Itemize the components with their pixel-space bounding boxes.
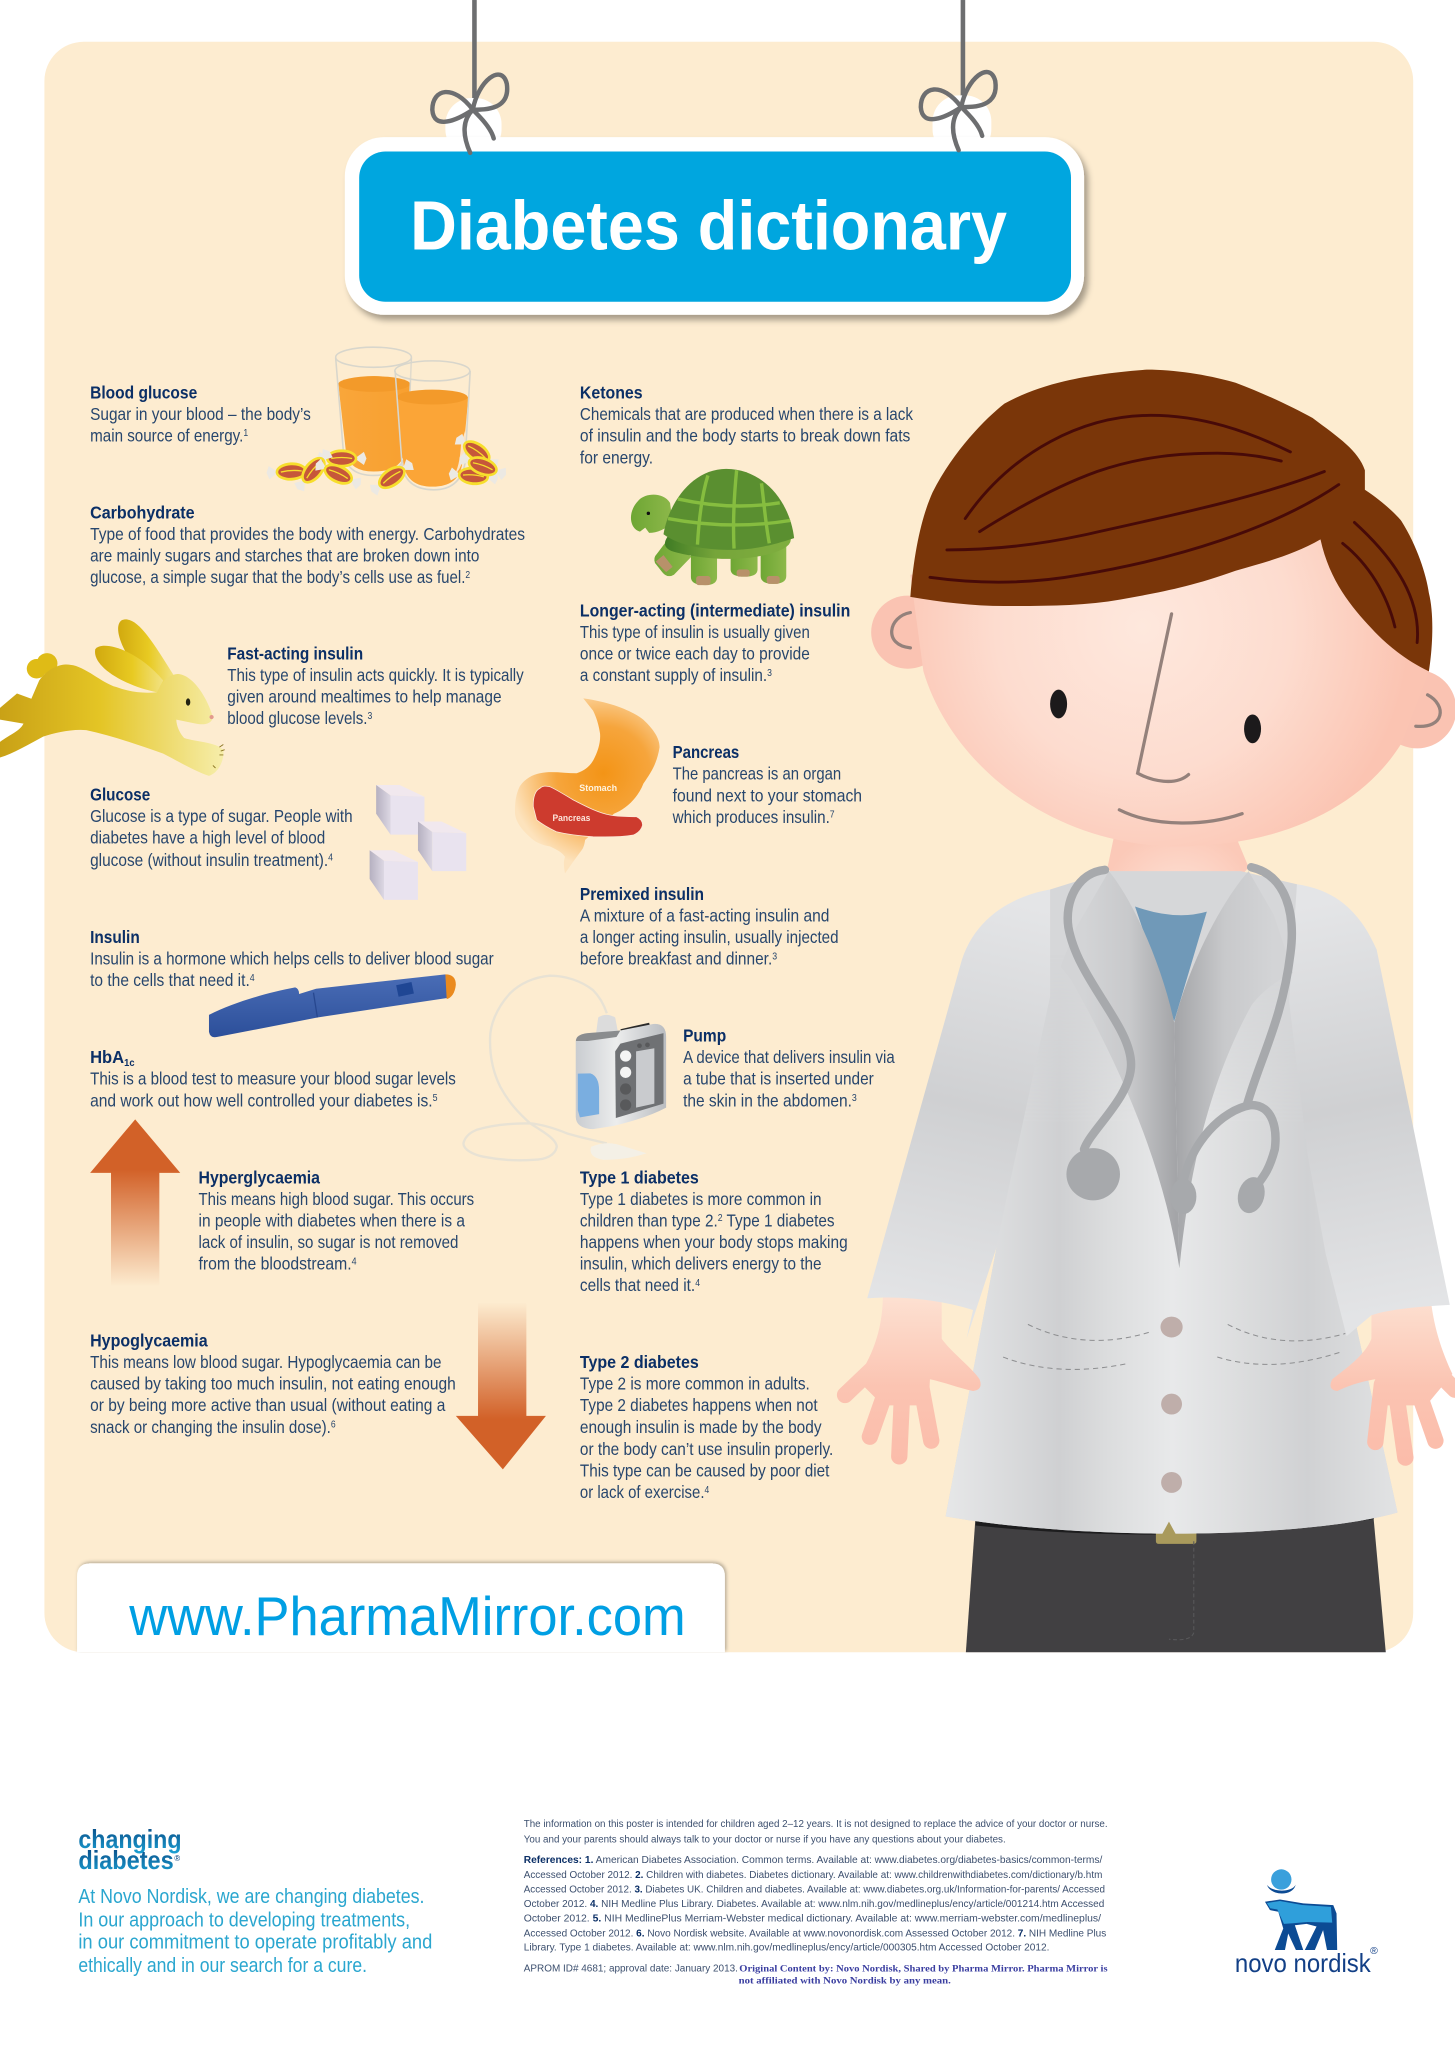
logo: changing diabetes: ®: [174, 1854, 180, 1863]
heading: Pump: [683, 1026, 726, 1046]
text: Novo Nordisk statement: [78, 1886, 432, 1977]
entry: Ketones: for energy.: [580, 448, 653, 468]
entry: Hyperglycaemia: [199, 1167, 474, 1274]
icon: stomach and pancreas: Pancreas: [552, 813, 590, 823]
entry: Glucose: glucose (without insulin treatment).: [90, 850, 356, 870]
sign: title board: [345, 137, 1084, 315]
icon: turtle: [631, 469, 794, 585]
heading: Blood glucose: [90, 382, 198, 402]
text: disclaimer and references: not affiliated with Novo Nordisk by any mean.: [739, 1975, 951, 1986]
lapels: [1061, 871, 1293, 1268]
face: [910, 522, 1429, 846]
entry: Type 1 diabetes: Type 1 diabetes: [723, 1210, 835, 1230]
entry: Longer-acting insulin: once or twice each day to provide: [580, 644, 810, 664]
entry: Insulin: 4: [250, 973, 255, 984]
entry: Type 2 diabetes: or lack of exercise.: [580, 1482, 724, 1502]
pocket stitching: [1003, 1324, 1345, 1369]
entry: Pump: A device that delivers insulin via: [683, 1047, 895, 1067]
entry: Type 2 diabetes: Type 2 is more common in adults.: [580, 1374, 810, 1394]
entry: Longer-acting insulin: a constant supply of insulin.: [580, 665, 792, 685]
icon: insulin pen: [209, 974, 456, 1037]
logo: changing diabetes: changing: [78, 1824, 182, 1854]
text: disclaimer and references: The information on this poster is intended for children aged 2–12 years. It is not designed to replace the advice of your doctor or nurse.: [524, 1819, 1108, 1830]
icon: two glasses of juice with sweets: [266, 347, 509, 499]
entry: Fast-acting insulin: blood glucose levels.: [227, 708, 387, 728]
entry: Blood glucose: 1: [243, 428, 248, 439]
entry: Carbohydrate: are mainly sugars and starches that are broken down into: [90, 546, 479, 566]
heading: Type 2 diabetes: [580, 1352, 699, 1372]
arrow: down (hypoglycaemia): [456, 1302, 546, 1469]
entry: Hyperglycaemia: 4: [352, 1256, 357, 1267]
entry: Type 1 diabetes: 2: [718, 1213, 723, 1224]
entry: Carbohydrate: Type of food that provides the body with energy. Carbohydrates: [90, 524, 525, 544]
logo: changing diabetes: diabetes: [78, 1845, 174, 1875]
entry: Pancreas: 7: [830, 810, 835, 821]
entry: Pancreas: [672, 742, 862, 827]
heading: Longer-acting (intermediate) insulin: [580, 600, 850, 620]
entry: Longer-acting insulin: 3: [767, 668, 772, 679]
entry: Pump: the skin in the abdomen.: [683, 1090, 871, 1110]
entry: Blood glucose: Sugar in your blood – the body’s: [90, 404, 311, 424]
entry: Hypoglycaemia: This means low blood sugar. Hypoglycaemia can be: [90, 1352, 441, 1372]
logo: Novo Nordisk: ®: [1370, 1946, 1378, 1957]
entry: Type 2 diabetes: or the body can’t use insulin properly.: [580, 1439, 833, 1459]
heading: Fast-acting insulin: [227, 644, 363, 664]
entry: Fast-acting insulin: given around mealtimes to help manage: [227, 687, 502, 707]
entry: Insulin: [90, 927, 494, 990]
text: disclaimer and references: October 2012. 4. NIH Medline Plus Library. Diabetes. Available at: www.nlm.nih.gov/medlineplus/ency/article/001214.htm Accessed: [524, 1899, 1104, 1910]
entry: Type 1 diabetes: 4: [695, 1278, 701, 1289]
title: Diabetes dictionary: [410, 186, 1007, 264]
text: disclaimer and references: [524, 1819, 1108, 1986]
heading: Hypoglycaemia: [90, 1331, 208, 1351]
icon: rabbit: [0, 619, 225, 776]
entry: Ketones: of insulin and the body starts to break down fats: [580, 425, 910, 445]
entry: Ketones: [580, 382, 913, 468]
text: disclaimer and references: Library. Type 1 diabetes. Available at: www.nlm.nih.gov/medlineplus/ency/article/000305.htm Accessed October 2012.: [524, 1943, 1049, 1954]
text: Novo Nordisk statement: in our commitment to operate profitably and: [78, 1932, 432, 1954]
entry: Glucose: 4: [328, 853, 334, 864]
heading: Glucose: [90, 785, 151, 805]
heading: Type 1 diabetes: [580, 1167, 699, 1187]
entry: Ketones: Chemicals that are produced when there is a lack: [580, 404, 913, 424]
text: disclaimer and references: October 2012. 5. NIH MedlinePlus Merriam-Webster medical dictionary. Available at: www.merriam-webster.com/medlineplus/: [524, 1913, 1101, 1924]
logo: Novo Nordisk: [1235, 1869, 1378, 1978]
neck: [1108, 836, 1249, 914]
entry: Type 1 diabetes: [580, 1167, 848, 1295]
entry: Glucose: [90, 785, 353, 870]
entry: Type 2 diabetes: This type can be caused by poor diet: [580, 1461, 830, 1481]
entry: Pump: a tube that is inserted under: [683, 1069, 874, 1089]
trousers: [966, 1509, 1386, 1652]
entry: Hyperglycaemia: from the bloodstream.: [199, 1254, 366, 1274]
hand: right: [1330, 1293, 1455, 1458]
entry: Type 1 diabetes: children than type 2.: [580, 1210, 735, 1230]
entry: Hypoglycaemia: or by being more active than usual (without eating a: [90, 1395, 446, 1415]
knot: right bow: [921, 72, 996, 150]
panel: cream background: [44, 42, 1413, 1652]
entry: Longer-acting insulin: [580, 600, 850, 685]
icon: stomach and pancreas: [515, 698, 660, 873]
website banner: [52, 1563, 744, 1663]
hair: [910, 370, 1432, 671]
entry: Fast-acting insulin: [227, 644, 524, 728]
logo: changing diabetes: [78, 1824, 182, 1875]
entry: Type 2 diabetes: 4: [704, 1485, 710, 1496]
entry: Pancreas: The pancreas is an organ: [673, 764, 841, 784]
heading: 1c: [124, 1058, 135, 1069]
ears: [871, 596, 1455, 748]
entry: Hyperglycaemia: lack of insulin, so sugar is not removed: [199, 1232, 458, 1252]
entry: Pancreas: found next to your stomach: [673, 785, 862, 805]
entry: Type 1 diabetes: insulin, which delivers energy to the: [580, 1254, 822, 1274]
entry: Pump: [683, 1026, 895, 1110]
entry: Premixed insulin: a longer acting insulin, usually injected: [580, 927, 839, 947]
text: disclaimer and references: APROM ID# 4681; approval date: January 2013.: [524, 1964, 738, 1975]
text: disclaimer and references: Accessed October 2012. 3. Diabetes UK. Children and diabetes. Available at: www.diabetes.org.uk/Information-for-parents/ Accessed: [524, 1885, 1105, 1896]
entry: Hypoglycaemia: caused by taking too much insulin, not eating enough: [90, 1374, 456, 1394]
heading: Insulin: [90, 927, 140, 947]
entry: Hypoglycaemia: [90, 1331, 456, 1437]
heading: Premixed insulin: [580, 884, 704, 904]
entry: Hypoglycaemia: 6: [331, 1420, 336, 1431]
heading: HbA: [90, 1047, 126, 1067]
heading: Carbohydrate: [90, 503, 195, 523]
entry: HbA1c: This is a blood test to measure your blood sugar levels: [90, 1069, 456, 1089]
icon: insulin pump: [463, 976, 666, 1160]
icon: bull: [1265, 1869, 1337, 1950]
entry: Hyperglycaemia: This means high blood sugar. This occurs: [199, 1189, 474, 1209]
entry: Blood glucose: main source of energy.: [90, 425, 264, 445]
website banner: www.PharmaMirror.com: [128, 1585, 686, 1647]
arrow: up (hyperglycaemia): [90, 1119, 180, 1287]
entry: Carbohydrate: 2: [465, 570, 470, 581]
hand: left: [845, 1293, 981, 1456]
mouth: [1119, 810, 1242, 823]
entry: Fast-acting insulin: This type of insulin acts quickly. It is typically: [227, 665, 524, 685]
entry: Pancreas: which produces insulin.: [673, 807, 851, 827]
entry: HbA1c: 5: [433, 1093, 438, 1104]
entry: Insulin: to the cells that need it.: [90, 970, 267, 990]
text: disclaimer and references: You and your parents should always talk to your doctor or nurse if you have any questions about your diabetes.: [524, 1834, 1006, 1845]
entry: Glucose: diabetes have a high level of blood: [90, 828, 325, 848]
coat body: [946, 871, 1398, 1536]
entry: Type 1 diabetes: happens when your body stops making: [580, 1232, 848, 1252]
entry: Insulin: Insulin is a hormone which helps cells to deliver blood sugar: [90, 949, 494, 969]
text: disclaimer and references: Accessed October 2012. 2. Children with diabetes. Diabetes dictionary. Available at: www.childrenwithdiabetes.com/dictionary/b.htm: [524, 1870, 1102, 1881]
hanging strings and knots: [445, 0, 991, 155]
eyes: [1050, 690, 1261, 743]
entry: Hyperglycaemia: in people with diabetes when there is a: [199, 1210, 465, 1230]
entry: Premixed insulin: A mixture of a fast-acting insulin and: [580, 905, 829, 925]
icon: stomach and pancreas: Stomach: [579, 783, 618, 793]
text: Novo Nordisk statement: At Novo Nordisk, we are changing diabetes.: [78, 1886, 424, 1908]
entry: Type 2 diabetes: [580, 1352, 833, 1502]
heading: Pancreas: [673, 742, 739, 762]
coat sleeves and details: [867, 871, 1450, 1493]
knot: left bow: [432, 75, 507, 153]
entry: HbA1c: [90, 1047, 456, 1110]
entry: Premixed insulin: [580, 884, 839, 969]
entry: Premixed insulin: 3: [772, 951, 778, 962]
entry: Blood glucose: [90, 382, 311, 445]
entry: Pump: 3: [852, 1093, 857, 1104]
buttons: [1160, 1317, 1183, 1493]
text: Novo Nordisk statement: In our approach to developing treatments,: [78, 1910, 410, 1932]
entry: Type 1 diabetes: Type 1 diabetes is more common in: [580, 1189, 822, 1209]
entry: Fast-acting insulin: 3: [367, 711, 373, 722]
entry: Hypoglycaemia: snack or changing the insulin dose).: [90, 1417, 365, 1437]
icon: sugar cubes: [370, 785, 466, 900]
entry: Longer-acting insulin: This type of insulin is usually given: [580, 622, 810, 642]
entry: Carbohydrate: [90, 503, 525, 587]
heading: Ketones: [580, 382, 643, 402]
entry: Type 2 diabetes: Type 2 diabetes happens when not: [580, 1395, 818, 1415]
nose: [1138, 614, 1189, 781]
heading: Hyperglycaemia: [199, 1167, 320, 1187]
entry: Glucose: Glucose is a type of sugar. People with: [90, 806, 353, 826]
text: disclaimer and references: Accessed October 2012. 6. Novo Nordisk website. Available at www.novonordisk.com Assessed October 2012. 7. NIH Medline Plus: [524, 1928, 1106, 1939]
entry: HbA1c: and work out how well controlled your diabetes is.: [90, 1090, 469, 1110]
logo: Novo Nordisk: novo nordisk: [1235, 1948, 1372, 1978]
stethoscope: [1066, 867, 1292, 1216]
entry: Carbohydrate: glucose, a simple sugar that the body’s cells use as fuel.: [90, 567, 520, 587]
entry: Premixed insulin: before breakfast and dinner.: [580, 949, 795, 969]
text: Novo Nordisk statement: ethically and in our search for a cure.: [78, 1955, 367, 1977]
character: doctor: [845, 370, 1455, 1652]
text: disclaimer and references: Original Content by: Novo Nordisk, Shared by Pharma Mirror. Pharma Mirror is: [739, 1964, 1108, 1975]
entry: Type 2 diabetes: enough insulin is made by the body: [580, 1417, 822, 1437]
text: disclaimer and references: References: 1. American Diabetes Association. Common terms. Available at: www.diabetes.org/diabetes-basics/common-terms/: [524, 1855, 1103, 1866]
entry: Type 1 diabetes: cells that need it.: [580, 1275, 709, 1295]
